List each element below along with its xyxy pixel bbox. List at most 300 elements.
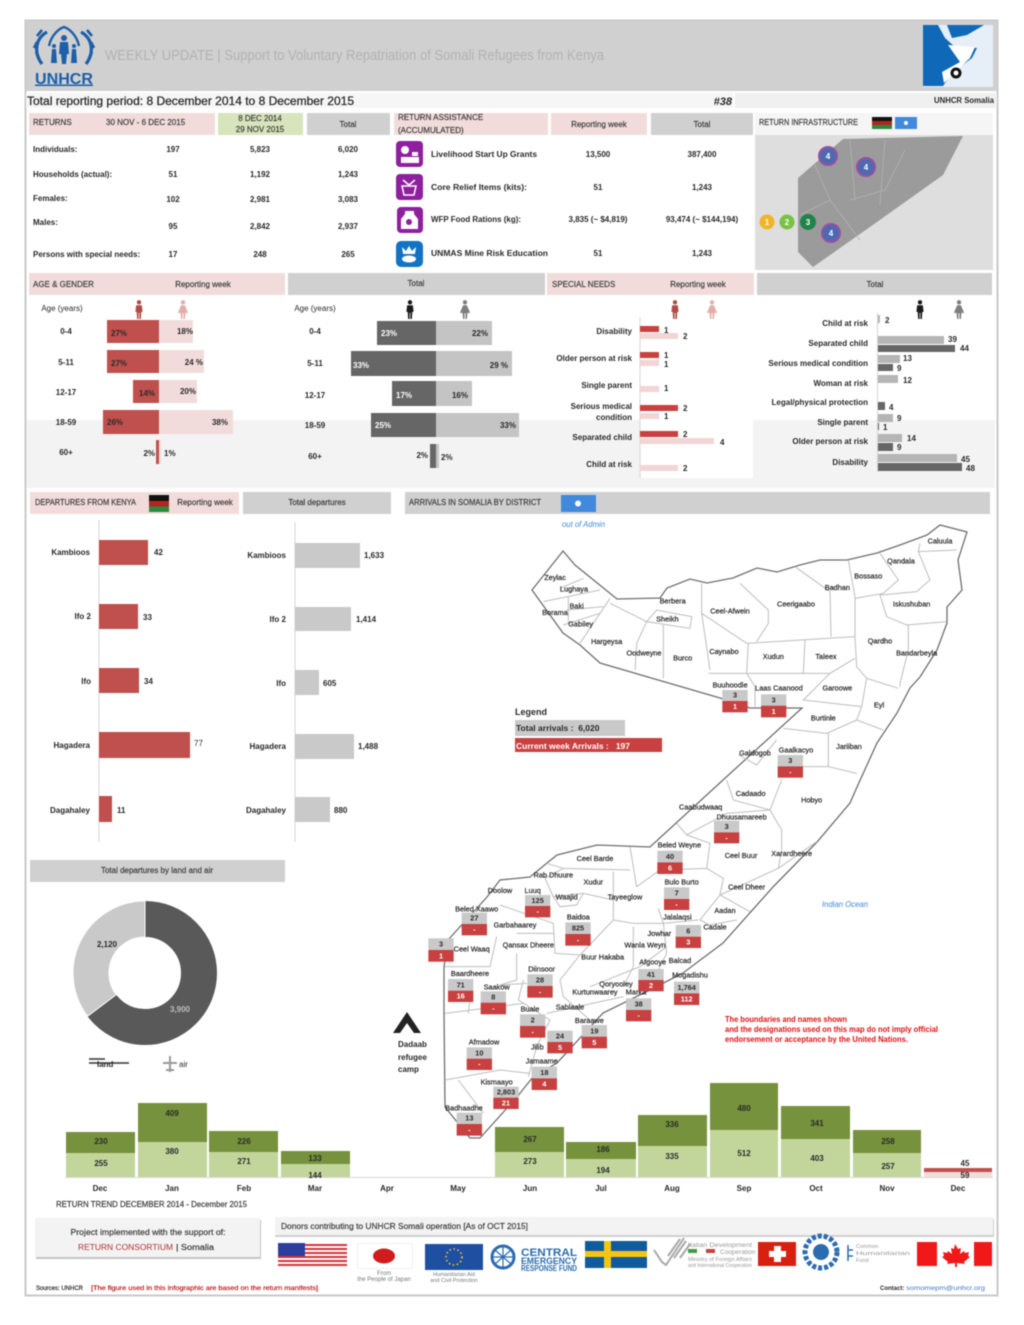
chart: monthly return trend: 230 [94, 1137, 108, 1146]
age pyramid: total: 5-11 [307, 359, 323, 368]
panel: departures reporting week: Reporting week [177, 498, 234, 507]
icon: Somalia flag [561, 495, 596, 512]
footer contact [880, 1286, 985, 1292]
logo: Common Humanitarian Fund: Common [856, 1244, 878, 1250]
icon: male [406, 300, 414, 319]
map: southern districts: Caabudwaaq [679, 802, 722, 811]
returns header: 29 NOV 2015 [236, 125, 285, 134]
assistance rows: 51 [594, 183, 603, 192]
map: northern arrivals boxes: 1 [733, 702, 737, 711]
map: southern districts: Cadale [703, 923, 727, 932]
chart: monthly return trend [56, 1083, 993, 1209]
reporting period bar: Total reporting period: 8 December 2014 to 8 December 2015 [27, 94, 354, 108]
bar chart: special needs total: 44 [960, 344, 969, 353]
chart: monthly return trend: Jul [595, 1184, 607, 1193]
returns rows: 17 [169, 250, 178, 259]
bar chart: total departures: Ifo 2 [270, 615, 287, 624]
flag: Switzerland [758, 1242, 796, 1266]
bar chart: special needs total: Woman at risk [813, 379, 869, 388]
age pyramid: reporting week: 20% [180, 387, 196, 396]
panel: age and gender reporting week: Age (years) [41, 304, 83, 313]
bar chart: special needs total: 4 [889, 403, 894, 412]
flag: Canada [917, 1242, 992, 1267]
panel: donors [275, 1217, 994, 1284]
infrastructure markers: 4 [864, 163, 869, 172]
returns header: RETURNS [33, 118, 72, 127]
bar chart: special needs total: Legal/physical protection [772, 398, 868, 407]
map: southern districts: Kismaayo [481, 1078, 513, 1087]
chart: monthly return trend: 267 [523, 1135, 537, 1144]
bar chart: special needs reporting week: Separated child [572, 433, 632, 442]
map: southern districts: Buur Hakaba [581, 953, 625, 962]
chart: monthly return trend: May [450, 1184, 466, 1193]
chart: monthly return trend: Oct [809, 1184, 823, 1193]
age pyramid: reporting week: 18-59 [56, 418, 77, 427]
map: southern districts: Jalalaqsi [663, 912, 692, 921]
bar chart: special needs reporting week: condition [596, 413, 632, 422]
logo: Common Humanitarian Fund: Humanitarian [856, 1251, 910, 1257]
age pyramid: reporting week: 5-11 [58, 358, 74, 367]
returns rows: 2,981 [250, 195, 271, 204]
map: southern arrivals boxes: - [725, 833, 728, 842]
bar chart: departures reporting week: Dagahaley [50, 806, 91, 815]
bar chart: total departures: Kambioos [247, 551, 287, 560]
panel: special needs total: Total [867, 280, 884, 289]
map: northern arrivals boxes: 3 [772, 695, 776, 704]
chart: monthly return trend: Mar [308, 1184, 322, 1193]
age pyramid: reporting week: 0-4 [60, 327, 72, 336]
assistance header: (ACCUMULATED) [398, 126, 464, 135]
bar chart: special needs total: Disability [832, 458, 869, 467]
age pyramid: total: 0-4 [309, 327, 321, 336]
bar chart: special needs reporting week: Single parent [581, 381, 632, 390]
chart: monthly return trend: 258 [881, 1137, 895, 1146]
icon: male [671, 300, 679, 319]
map: southern districts: Sablaale [556, 1002, 584, 1011]
map: southern arrivals boxes: 27 [470, 914, 478, 923]
chart: monthly return trend: Feb [237, 1184, 251, 1193]
map: southern districts: Baraawe [575, 1016, 604, 1025]
map: southern arrivals boxes: - [473, 925, 476, 934]
map: northern districts: Zeylac [544, 573, 566, 582]
chart: monthly return trend: Jan [165, 1184, 179, 1193]
map: northern districts: Caluula [928, 536, 953, 545]
map: southern arrivals boxes: 19 [590, 1026, 598, 1035]
bar chart: total departures: Ifo [276, 679, 286, 688]
bar chart: total departures: 1,488 [358, 742, 379, 751]
footer contact: Contact: [880, 1286, 904, 1292]
icon: livelihood grant [396, 141, 423, 167]
chart: monthly return trend: 226 [237, 1137, 251, 1146]
logo: Italian Development Cooperation [654, 1238, 756, 1269]
map: northern districts: Sheikh [656, 615, 679, 624]
map: southern districts: Beled Xaawo [455, 904, 498, 913]
bar chart: special needs total: Older person at risk [792, 437, 869, 446]
bar chart: special needs reporting week: 1 [664, 412, 669, 421]
age pyramid: reporting week: 12-17 [56, 388, 77, 397]
map legend [515, 707, 662, 752]
bar chart: special needs total: 14 [907, 434, 916, 443]
map: northern districts: Jariiban [836, 742, 862, 751]
infrastructure markers: 4 [826, 152, 831, 161]
camp label: Dadaab [398, 1040, 427, 1049]
map: southern districts: Diinsoor [528, 964, 556, 973]
map legend: Total arrivals : 6,020 [516, 723, 600, 733]
map: northern arrivals boxes: 3 [788, 756, 792, 765]
donut chart: 2,120 [97, 940, 118, 949]
map: northern arrivals boxes: 1 [772, 707, 776, 716]
panel: age and gender reporting week: Reporting week [175, 280, 232, 289]
map: southern arrivals boxes: 41 [647, 970, 655, 979]
map: southern districts: Hobyo [801, 796, 822, 805]
map: southern districts: Cadaado [736, 789, 766, 798]
assistance rows: 387,400 [688, 150, 717, 159]
chart: monthly return trend: 186 [596, 1145, 610, 1154]
bar chart: special needs reporting week: 1 [664, 326, 669, 335]
bar chart: departures reporting week: 42 [154, 548, 163, 557]
map: southern arrivals boxes: 16 [457, 992, 465, 1001]
chart: monthly return trend: 480 [737, 1104, 751, 1113]
bar chart: special needs reporting week: 4 [720, 438, 725, 447]
panel: special needs total [757, 273, 992, 473]
map: southern districts: Jamaame [526, 1057, 558, 1066]
logo: Japan: From [377, 1271, 391, 1277]
age pyramid: reporting week: 26% [107, 418, 123, 427]
bar chart: special needs reporting week: 2 [683, 430, 688, 439]
map: northern districts: Borama [542, 608, 569, 617]
logo: Italian Development Cooperation: and International Cooperation [688, 1263, 752, 1269]
map: northern districts: Gabiley [568, 620, 593, 629]
icon: Somalia flag [895, 117, 917, 129]
returns rows: 1,192 [250, 170, 271, 179]
light band behind lower charts [27, 420, 995, 488]
assistance header [394, 113, 753, 135]
panel: return infrastructure: RETURN INFRASTRUCTURE [759, 118, 858, 127]
map: southern districts: Ceel Buur [725, 851, 758, 860]
chart: monthly return trend: 45 [961, 1159, 970, 1168]
map label: out of admin: out of Admin [562, 520, 606, 529]
reporting period bar: #38 [714, 96, 733, 108]
map: southern arrivals boxes: 825 [572, 924, 584, 933]
map: southern arrivals boxes: 8 [491, 992, 495, 1001]
age pyramid: reporting week: 1% [164, 449, 176, 458]
age pyramid: total: 12-17 [305, 391, 326, 400]
map: northern districts: Burco [673, 654, 692, 663]
map: southern districts: Baardheere [451, 969, 489, 978]
bar chart: special needs total [768, 313, 975, 473]
age pyramid: total: 33% [353, 361, 369, 370]
map: southern districts: Qansax Dheere [503, 941, 554, 950]
map: southern arrivals boxes: 6 [686, 926, 690, 935]
bar chart: special needs total: Separated child [808, 339, 868, 348]
returns rows: Persons with special needs: [33, 250, 140, 259]
bar chart: total departures [246, 522, 385, 842]
map: southern arrivals boxes: 5 [558, 1043, 562, 1052]
map: southern districts: Bulo Burto [665, 877, 699, 886]
chart: monthly return trend: Dec [951, 1184, 966, 1193]
chart: monthly return trend: Aug [664, 1184, 680, 1193]
returns header: 8 DEC 2014 [238, 114, 282, 123]
icon: core relief items [396, 174, 423, 200]
icon: UNHCR logo [34, 27, 94, 88]
map: southern arrivals boxes: 18 [540, 1068, 548, 1077]
chart: monthly return trend: 255 [94, 1159, 108, 1168]
returns rows: 2,842 [250, 222, 271, 231]
panel: arrivals in Somalia by district [393, 492, 990, 1138]
panel: special needs reporting week: Reporting week [670, 280, 727, 289]
map: southern arrivals boxes: - [637, 1011, 640, 1020]
panel: project support: | Somalia [176, 1243, 215, 1252]
map: northern districts: Ceerigaabo [777, 600, 815, 609]
infrastructure markers [760, 147, 875, 242]
map: southern arrivals boxes [428, 821, 739, 1136]
age pyramid: total: 2% [441, 453, 453, 462]
map: southern districts: Jilib [531, 1042, 544, 1051]
bar chart: special needs reporting week: 2 [683, 464, 688, 473]
returns rows: Individuals: [33, 145, 77, 154]
map: southern districts: Mogadishu [672, 971, 708, 980]
assistance rows: Livelihood Start Up Grants [431, 150, 538, 159]
age pyramid: reporting week: 2% [143, 449, 155, 458]
disclaimer: The boundaries and names shown [725, 1015, 847, 1024]
chart: monthly return trend: 512 [737, 1149, 751, 1158]
map: southern districts [445, 780, 822, 1113]
map legend: Current week Arrivals : 197 [516, 741, 630, 751]
map: southern arrivals boxes: 24 [556, 1032, 565, 1041]
icon: food rations [397, 207, 423, 233]
bar chart: special needs total: 9 [897, 364, 902, 373]
map: southern districts: Saakow [484, 983, 510, 992]
chart: monthly return trend: 380 [165, 1147, 179, 1156]
age pyramid: reporting week: 14% [139, 389, 155, 398]
infrastructure markers: 1 [765, 218, 770, 227]
chart: monthly return trend: 409 [165, 1109, 179, 1118]
chart: monthly return trend: Sep [737, 1184, 751, 1193]
returns rows: 1,243 [338, 170, 359, 179]
assistance header: RETURN ASSISTANCE [398, 113, 483, 122]
icon: male [916, 300, 924, 319]
logo: Common Humanitarian Fund [805, 1236, 910, 1268]
logo: Italian Development Cooperation: Italian Development [688, 1242, 752, 1249]
age pyramid: total [305, 321, 519, 468]
map: southern arrivals boxes: - [492, 1004, 495, 1013]
panel: project support: Project implemented with the support of: [70, 1228, 226, 1237]
panel: total departures: Total departures [288, 498, 346, 507]
map: southern arrivals boxes: 3 [439, 940, 443, 949]
assistance rows: 93,474 (~ $144,194) [666, 215, 738, 224]
panel: return assistance [394, 113, 753, 267]
bar chart: total departures: Hagadera [250, 742, 287, 751]
logo: Italian Development Cooperation: Ministry of Foreign Affairs [688, 1257, 752, 1263]
logo: European Union [425, 1244, 483, 1284]
returns rows: 95 [169, 222, 178, 231]
icon: mine risk education [396, 241, 423, 267]
camp label: refugee [398, 1053, 427, 1062]
bar chart: departures reporting week: Ifo [81, 677, 91, 686]
map: northern districts: Qandala [887, 556, 916, 565]
map: southern districts: Rab Dhuure [534, 871, 573, 880]
returns rows: 6,020 [338, 145, 359, 154]
panel: departures reporting week: DEPARTURES FROM KENYA [35, 498, 137, 507]
map: northern districts: Berbera [660, 596, 687, 605]
flag: USA [278, 1243, 347, 1268]
logo: European Union: and Civil Protection [430, 1278, 478, 1284]
map: southern districts: Doolow [488, 886, 513, 895]
map: southern arrivals boxes: 38 [635, 1000, 643, 1009]
icon: locator map [923, 25, 993, 87]
returns rows: 197 [166, 145, 180, 154]
donut legend: air [179, 1060, 188, 1069]
panel: total departures [243, 492, 391, 842]
map: southern arrivals boxes: 40 [666, 852, 674, 861]
map: northern districts: Eyl [874, 700, 884, 709]
assistance rows: WFP Food Rations (kg): [431, 215, 521, 224]
map: northern districts [542, 536, 957, 773]
map: southern arrivals boxes: 1,764 [677, 983, 697, 992]
chart: monthly return trend: 273 [523, 1157, 537, 1166]
map: northern districts: Bossaso [854, 571, 882, 580]
bar chart: total departures: 605 [323, 679, 337, 688]
infrastructure markers: 4 [829, 229, 834, 238]
bar chart: special needs total: 12 [903, 376, 912, 385]
map: northern arrivals boxes [722, 690, 803, 778]
logo: CERF: CENTRAL [521, 1247, 577, 1259]
icon: Kenya flag [149, 495, 169, 512]
assistance rows: 13,500 [586, 150, 611, 159]
assistance rows: 3,835 (~ $4,819) [569, 215, 628, 224]
chart: monthly return trend: 257 [881, 1162, 895, 1171]
map: northern districts: Ceel-Afwein [710, 606, 750, 615]
map: northern districts: Caynabo [709, 647, 739, 656]
logo: Japan: the People of Japan [357, 1277, 411, 1283]
icon: refugee camp tent [393, 1012, 421, 1033]
donut legend [89, 1056, 188, 1072]
bar chart: special needs reporting week: 2 [683, 332, 688, 341]
returns rows: Males: [33, 218, 58, 227]
map: northern districts: Baki [570, 601, 584, 610]
age pyramid: total: 16% [452, 391, 468, 400]
bar chart: special needs reporting week: 1 [664, 351, 669, 360]
title: WEEKLY UPDATE | Support to Voluntary Repatriation of Somali Refugees from Kenya [105, 47, 605, 64]
logo: Italian Development Cooperation: Cooperation [720, 1249, 756, 1256]
assistance rows: 1,243 [692, 183, 713, 192]
bar chart: departures reporting week: Hagadera [54, 741, 91, 750]
map: southern districts: Buale [521, 1004, 539, 1013]
map: northern arrivals boxes: - [789, 767, 792, 776]
infrastructure markers: 3 [806, 218, 811, 227]
map: northern arrivals boxes: 3 [733, 691, 737, 700]
logo: European Union: Humanitarian Aid [433, 1272, 475, 1278]
panel: departures by land and air: Total departures by land and air [101, 866, 213, 875]
map: southern arrivals boxes: 2,803 [497, 1088, 515, 1097]
returns rows: Households (actual): [33, 170, 112, 179]
age pyramid: reporting week: 18% [177, 327, 193, 336]
map: southern arrivals boxes: - [478, 1060, 481, 1069]
bar chart: departures reporting week: Ifo 2 [75, 612, 92, 621]
chart: monthly return trend: Jun [523, 1184, 537, 1193]
age pyramid: total: 2% [416, 451, 428, 460]
returns rows: 51 [169, 170, 178, 179]
map: southern arrivals boxes: 28 [536, 976, 544, 985]
bar chart: special needs total: 2 [885, 316, 890, 325]
map: northern districts: Oodweyne [626, 649, 662, 658]
donut chart: 3,900 [170, 1005, 191, 1014]
map: northern districts: Buuhoodle [712, 680, 748, 689]
infrastructure map [755, 135, 993, 270]
map: southern arrivals boxes: 21 [502, 1099, 510, 1108]
bar chart: departures reporting week: 77 [194, 739, 203, 748]
disclaimer: and the designations used on this map do not imply official [725, 1025, 938, 1034]
bar chart: departures reporting week: 11 [117, 806, 126, 815]
chart: monthly return trend: 194 [596, 1166, 610, 1175]
disclaimer [725, 1015, 938, 1044]
map: northern districts: Iskushuban [893, 600, 930, 609]
map: southern districts: Marka [626, 988, 647, 997]
map: southern districts: Afmadow [469, 1038, 500, 1047]
bar chart: special needs total: 45 [961, 455, 970, 464]
chart: monthly return trend: Nov [879, 1184, 895, 1193]
panel: age and gender reporting week: AGE & GENDER [33, 280, 94, 289]
age pyramid: total: 25% [375, 421, 391, 430]
returns header: Total [340, 120, 357, 129]
age pyramid: reporting week: 60+ [59, 448, 73, 457]
map: southern arrivals boxes: 2 [649, 981, 653, 990]
map: southern districts: Afgooye [639, 958, 666, 967]
map: southern districts: Kurtunwaarey [572, 988, 618, 997]
donut chart [73, 901, 199, 1027]
returns rows: 102 [166, 195, 180, 204]
panel: age and gender reporting week [29, 273, 285, 464]
age pyramid: reporting week: 27% [111, 329, 127, 338]
age pyramid: total: 60+ [308, 452, 322, 461]
logo: CERF [492, 1246, 577, 1273]
map label: Indian Ocean: Indian Ocean [822, 900, 869, 909]
returns header: 30 NOV - 6 DEC 2015 [106, 118, 186, 127]
reporting period bar: UNHCR Somalia [934, 96, 995, 105]
age pyramid: reporting week [56, 320, 233, 464]
chart: monthly return trend: 271 [237, 1157, 251, 1166]
panel: age and gender total [288, 273, 545, 468]
map: northern districts: Qardho [868, 637, 892, 646]
map: southern arrivals boxes: 1 [439, 951, 443, 960]
footer sources: Sources: UNHCR [36, 1286, 84, 1292]
map: northern districts: Galdogob [739, 749, 771, 758]
panel: returns table [29, 113, 390, 259]
age pyramid: total: 29 % [490, 361, 508, 370]
chart: monthly return trend: 403 [810, 1154, 824, 1163]
bar chart: departures reporting week [50, 520, 203, 842]
map: southern districts: Garbahaarey [494, 921, 537, 930]
logo: CERF: EMERGENCY [521, 1256, 577, 1266]
disclaimer: endorsement or acceptance by the United Nations. [725, 1035, 908, 1044]
map: southern districts: Beled Weyne [658, 841, 701, 850]
icon: female [460, 300, 470, 319]
bar chart: special needs total: 13 [903, 354, 912, 363]
bar chart: departures reporting week: 34 [144, 677, 153, 686]
map: southern arrivals boxes: - [531, 1027, 534, 1036]
map: southern districts: Tayeeglow [608, 892, 643, 901]
map: southern arrivals boxes: - [577, 935, 580, 944]
returns rows: 5,823 [250, 145, 271, 154]
donut legend: land [97, 1060, 114, 1069]
assistance rows: UNMAS Mine Risk Education [431, 249, 548, 258]
bar chart: special needs reporting week: 2 [683, 404, 688, 413]
bar chart: special needs total: Child at risk [822, 319, 869, 328]
map: southern districts: Aadan [714, 906, 736, 915]
reporting period bar [26, 93, 997, 108]
map: southern arrivals boxes: 71 [457, 980, 465, 989]
icon: UNHCR logo: UNHCR [35, 71, 93, 88]
